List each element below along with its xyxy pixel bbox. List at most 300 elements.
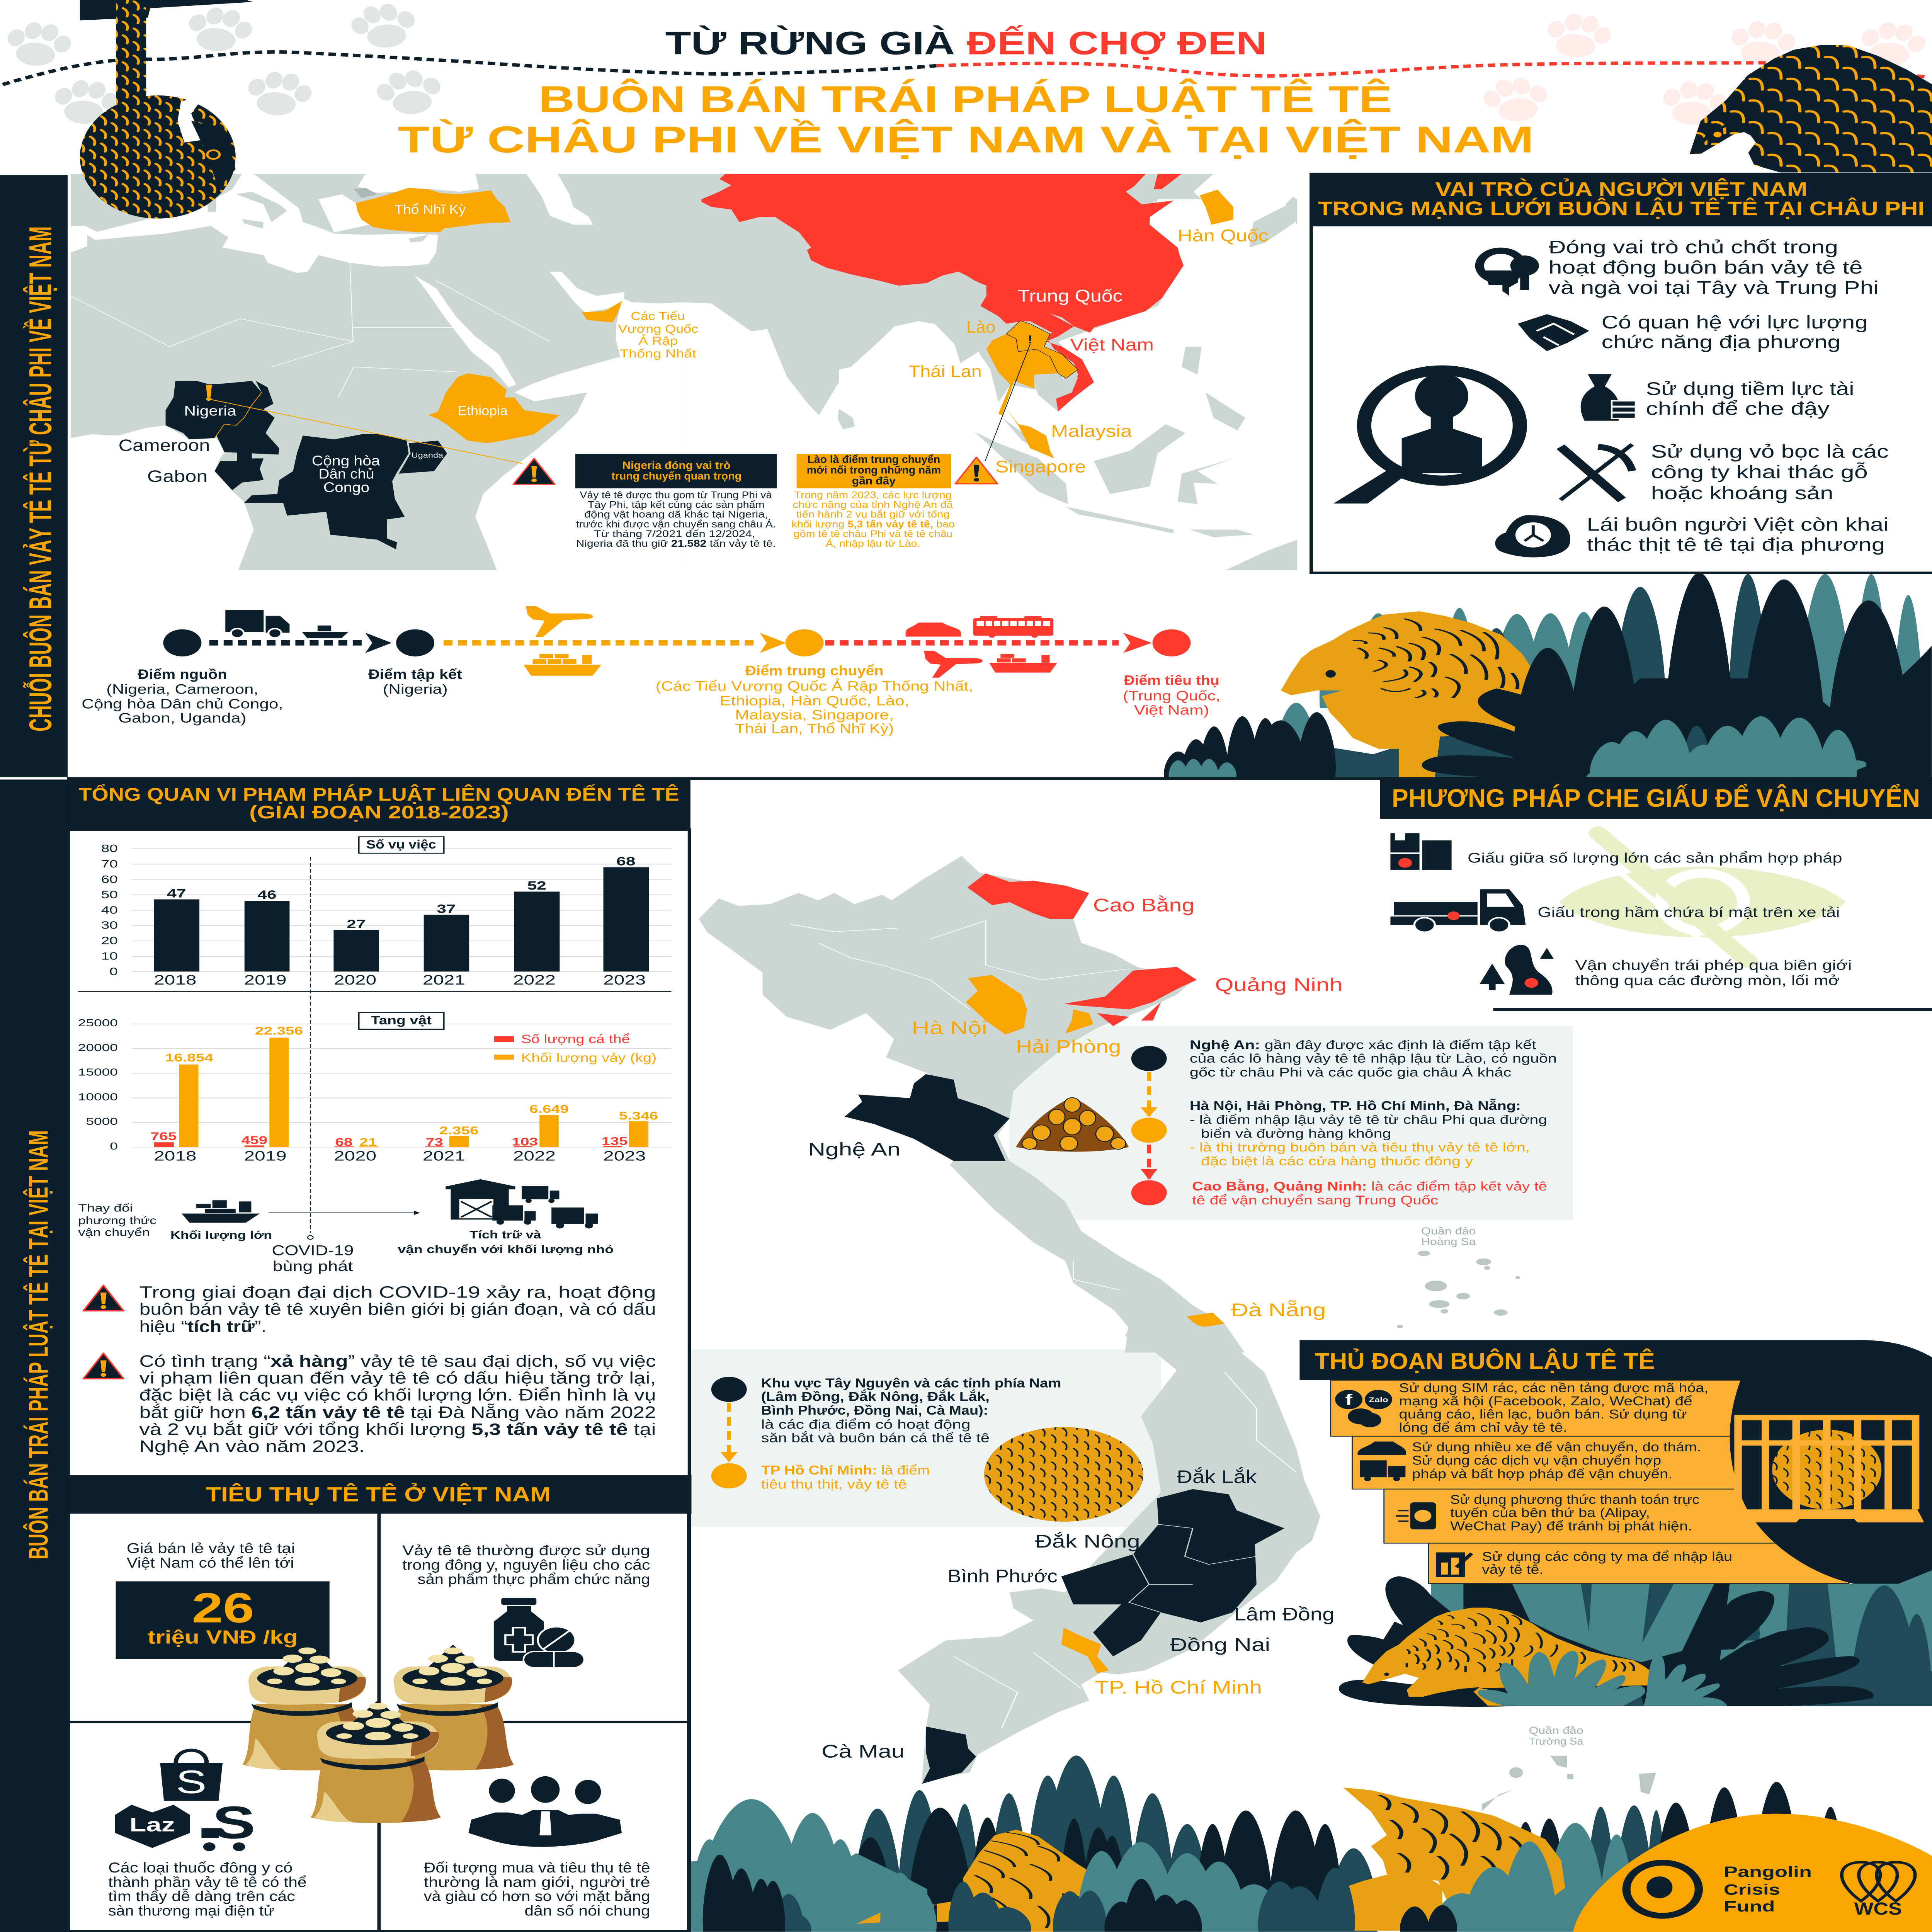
bar chart: seizures: 765 [150, 1130, 177, 1143]
bar chart: cases: 46 [257, 888, 277, 902]
vietnam labels: Đà Nẵng [1231, 1300, 1326, 1320]
map labels: Thống Nhất [620, 347, 696, 360]
label: Truong Sa: Quần đảo [1529, 1725, 1583, 1736]
bar chart: cases: 68 [616, 855, 635, 868]
bar chart: cases: 2022 [513, 973, 556, 988]
callout: Nigeria: trước khi được vận chuyển sang châu Á. [576, 519, 776, 530]
callout: Laos: tiến hành 2 vụ bắt giữ với tổng [796, 509, 950, 520]
callout: Laos: khối lượng 5,3 tấn vảy tê tê, bao [791, 519, 955, 530]
text: online sales [108, 1859, 307, 1919]
pangolin body [1281, 611, 1553, 777]
transport change diagram: phương thức [78, 1215, 156, 1227]
panel: smuggling tactics: Sử dụng SIM rác, các nền tảng được mã hóa, [1399, 1381, 1708, 1395]
icon: shopee [160, 1750, 223, 1801]
icon: boxes [1390, 831, 1452, 870]
map labels: Congo [323, 480, 369, 495]
icon: magnifier with person [1333, 371, 1520, 503]
pangolin bottom left [856, 1830, 1124, 1932]
icon: boat [302, 626, 349, 638]
warning note 2: đặc biệt là các vụ việc có khối lượng lớn. Điển hình là vụ [139, 1386, 656, 1404]
map labels: Thổ Nhĩ Kỳ [395, 202, 466, 217]
label: consumption: (Trung Quốc, [1123, 688, 1220, 704]
map labels [119, 202, 1269, 495]
transport change diagram [78, 1179, 614, 1256]
bar chart: seizures: 2.356 [439, 1124, 479, 1137]
text: buyers: thường là nam giới, người trẻ [424, 1874, 650, 1890]
bar chart: seizures: 5.346 [619, 1110, 658, 1122]
map: Vietnam north [699, 856, 1245, 1352]
label: source: Điểm nguồn [138, 667, 227, 682]
panel: smuggling tactics: tuyến của bên thứ ba (Alipay, [1450, 1505, 1650, 1520]
icon: red car [906, 622, 961, 637]
text: buyers: dân số nói chung [524, 1902, 650, 1919]
title: TỪ CHÂU PHI VỀ VIỆT NAM VÀ TẠI VIỆT NAM [398, 119, 1534, 161]
panel: smuggling tactics: lóng để ám chỉ vảy tê tê. [1399, 1420, 1567, 1435]
vietnam map panels [1009, 1026, 1573, 1220]
map labels: Cameroon [119, 436, 210, 455]
text: buyers: Đối tượng mua và tiêu thụ tê tê [424, 1859, 650, 1876]
logo: WCS [1842, 1862, 1915, 1918]
bar chart: cases: 40 [101, 905, 118, 916]
north route legend: đặc biệt là các cửa hàng thuốc đông y [1201, 1155, 1473, 1168]
panel: smuggling tactics: Sử dụng các công ty ma để nhập lậu [1482, 1549, 1732, 1564]
panel: overview header: (GIAI ĐOẠN 2018-2023) [249, 802, 509, 823]
label: source [82, 667, 283, 726]
bar chart: seizures: 459 [241, 1134, 267, 1146]
map labels: Vương Quốc [618, 322, 698, 335]
south route legend: Bình Phước, Đồng Nai, Cà Mau): [761, 1403, 988, 1418]
logo: Pangolin Crisis Fund: Crisis [1724, 1881, 1780, 1898]
text: online sales: thành phần vảy tê tê có thể [108, 1874, 307, 1890]
bar chart: seizures: 15000 [78, 1066, 118, 1078]
label: gathering: (Nigeria) [383, 682, 448, 697]
vietnam labels: Bình Phước [947, 1566, 1058, 1587]
panel: smuggling tactics: Sử dụng nhiều xe để vận chuyển, do thám. [1412, 1440, 1701, 1454]
label: Hoang Sa [1421, 1225, 1476, 1247]
icon: sendo cart: S [212, 1797, 255, 1848]
panel: role of Vietnamese [1310, 173, 1932, 574]
panel: role of Vietnamese: Có quan hệ với lực lượng [1602, 312, 1868, 333]
panel: smuggling tactics: Sử dụng các dịch vụ vận chuyển hợp [1412, 1453, 1661, 1468]
UAE [582, 301, 622, 323]
bar chart: seizures: 2018 [154, 1149, 196, 1164]
south route legend: Khu vực Tây Nguyên và các tỉnh phía Nam [761, 1376, 1061, 1390]
text: medicine use: trong đông y, nguyên liệu cho các [402, 1556, 650, 1573]
icon: medicine [494, 1598, 584, 1668]
label: Hoang Sa: Hoàng Sa [1421, 1236, 1476, 1247]
icon: mobile payment [1396, 1502, 1436, 1529]
south route legend: TP Hồ Chí Minh: là điểm [761, 1463, 930, 1478]
icon: lazada [115, 1805, 190, 1848]
transport change diagram: vận chuyển [78, 1227, 150, 1238]
bar chart: cases: 50 [101, 889, 118, 901]
bar chart: cases: 27 [347, 917, 366, 931]
bar chart: cases: 2019 [244, 973, 287, 988]
label: source: Gabon, Uganda) [118, 711, 247, 726]
label: consumption: Việt Nam) [1134, 702, 1209, 718]
icon: caged pangolin [1731, 1415, 1924, 1522]
bar chart: cases: Số vụ việc [366, 838, 436, 852]
callout: Nigeria: trung chuyển quan trọng [611, 471, 742, 482]
north route legend: Nghệ An: gần đây được xác định là điểm tập kết [1190, 1038, 1536, 1052]
logo: Pangolin Crisis Fund: Fund [1724, 1898, 1775, 1915]
callout: Laos: Trong năm 2023, các lực lượng [794, 490, 952, 500]
bar chart: cases: 60 [101, 874, 118, 886]
panel: role of Vietnamese: chức năng địa phương [1602, 332, 1840, 352]
label: Truong Sa [1529, 1725, 1583, 1747]
callout: Laos: mới nổi trong những năm [807, 464, 941, 476]
bar chart: seizures: 21 [359, 1136, 377, 1148]
panel: smuggling tactics: pháp và bất hợp pháp để vận chuyển. [1412, 1466, 1672, 1481]
south route legend: (Lâm Đồng, Đắk Nông, Đắk Lắk, [761, 1389, 990, 1404]
title: TỪ RỪNG GIÀ ĐẾN CHỢ ĐEN [665, 25, 1267, 61]
warning note 2: và 2 vụ bắt giữ với tổng khối lượng 5,3 tấn vảy tê tê tại [139, 1420, 656, 1439]
warning note 2 [83, 1352, 656, 1456]
icon: money bag [1581, 374, 1636, 421]
label: consumption [1123, 673, 1220, 718]
bar chart: seizures: 16.854 [165, 1052, 213, 1064]
legend: Khối lượng vảy (kg) [521, 1051, 656, 1065]
icon: truck with hidden compartment [1390, 889, 1526, 932]
map labels: Việt Nam [1070, 335, 1154, 354]
bar chart: cases: 37 [437, 902, 456, 916]
warning note 2: Có tình trạng “xả hàng” vảy tê tê sau đại dịch, số vụ việc [139, 1352, 656, 1371]
icon: truck [225, 610, 289, 638]
panel: consumption in Vietnam [70, 1475, 692, 1932]
icon: red ship [989, 654, 1057, 673]
icons: car and truck [1358, 1442, 1406, 1481]
panel: role of Vietnamese: hoặc khoáng sản [1651, 483, 1833, 503]
province: Ha Noi [966, 975, 1027, 1034]
province: Hai Phong [1065, 1009, 1093, 1034]
bar chart: seizures: 0 [110, 1140, 118, 1152]
COVID-19 marker: bùng phát [273, 1258, 353, 1274]
panel: concealment methods: Giấu trong hầm chứa bí mật trên xe tải [1537, 905, 1840, 920]
transport change diagram: Tích trữ và [469, 1229, 541, 1241]
icon: key and head [1480, 251, 1539, 296]
left band: section 1 title: CHUỖI BUÔN BÁN VẢY TÊ TÊ TỪ CHÂU PHI VỀ VIỆT NAM [23, 226, 58, 731]
vietnam labels: Cao Bằng [1093, 895, 1194, 915]
text: medicine use: Vảy tê tê thường được sử dụng [402, 1542, 650, 1558]
icon: warehouse and trucks [446, 1179, 598, 1228]
callout: Nigeria: Vảy tê tê được thu gom từ Trung Phi và [580, 490, 772, 500]
text: online sales: Các loại thuốc đông y có [108, 1859, 293, 1876]
map labels: Dân chủ [318, 466, 374, 482]
bar chart: seizures: 2020 [334, 1149, 376, 1164]
map: Africa and Middle East to Asia [71, 174, 1297, 570]
map labels: Nigeria [184, 403, 236, 419]
province: Cao Bang [967, 873, 1089, 919]
bar chart: seizures: 10000 [78, 1091, 118, 1102]
province: Ho Chi Minh City [1061, 1628, 1109, 1673]
vietnam labels: Đắk Nông [1035, 1531, 1140, 1552]
point: transit [786, 629, 823, 656]
source countries [166, 381, 447, 549]
province: Ca Mau [922, 1726, 976, 1784]
north route legend: Hà Nội, Hải Phòng, TP. Hồ Chí Minh, Đà Nẵng: [1190, 1098, 1521, 1113]
map labels: Hàn Quốc [1178, 226, 1269, 245]
label: transit: Malaysia, Singapore, [735, 707, 894, 723]
bar chart: seizures: Tang vật [371, 1014, 432, 1027]
callout: Nigeria: Nigeria đóng vai trò [622, 460, 731, 471]
map labels: Singapore [995, 457, 1086, 476]
panel: concealment methods: thông qua các đường mòn, lối mở [1575, 973, 1840, 988]
warning note 1: hiệu “tích trữ”. [139, 1318, 266, 1336]
logo: Pangolin Crisis Fund [1626, 1863, 1812, 1916]
icon: pile of scales [1016, 1097, 1129, 1152]
map labels: Lào [966, 318, 995, 337]
bar chart: cases: 70 [101, 858, 118, 870]
transport change diagram: vận chuyển với khối lượng nhỏ [398, 1243, 614, 1256]
warning note 1 [83, 1283, 656, 1336]
COVID-19 marker [272, 857, 354, 1274]
bar chart: seizures: 103 [512, 1136, 538, 1148]
panel: concealment methods [1380, 777, 1932, 1011]
panel: role of Vietnamese: và ngà voi tại Tây và Trung Phi [1549, 277, 1879, 298]
icon: curled pangolin [984, 1427, 1143, 1522]
province: Da Nang [1186, 1313, 1225, 1327]
islands [1397, 1251, 1656, 1811]
icon: orange ship [524, 654, 601, 676]
foliage and pangolin top section [1164, 573, 1932, 777]
north route legend: gốc từ châu Phi và các quốc gia châu Á khác [1190, 1065, 1511, 1080]
panel: overview header: TỔNG QUAN VI PHẠM PHÁP LUẬT LIÊN QUAN ĐẾN TÊ TÊ [78, 784, 679, 804]
bar chart: cases: 2023 [603, 973, 646, 988]
label: transit: (Các Tiểu Vương Quốc Ả Rập Thống Nhất, [656, 679, 973, 694]
icon: meat [1495, 515, 1570, 557]
warning note 2: vi phạm liên quan đến vảy tê tê có dấu hiệu tăng trở lại, [139, 1369, 656, 1387]
bar chart: seizures: 6.649 [529, 1103, 569, 1116]
panel: role of Vietnamese: Sử dụng tiềm lực tài [1646, 378, 1854, 399]
map labels: Cộng hòa [312, 453, 380, 469]
panel: role of Vietnamese: thác thịt tê tê tại địa phương [1587, 534, 1885, 555]
text: buyers [424, 1859, 650, 1919]
price block [116, 1540, 330, 1659]
province: Nghe An [845, 1074, 1010, 1161]
callout: Nigeria: Nigeria đã thu giữ 21.582 tấn vảy tê tê. [576, 538, 776, 549]
icon: saw and pickaxe [1561, 444, 1632, 500]
label: gathering [368, 667, 462, 697]
label: source: Cộng hòa Dân chủ Congo, [82, 697, 283, 712]
icon: cargo ship [182, 1200, 260, 1223]
panel: smuggling tactics: WeChat Pay) để tránh bị phát hiện. [1450, 1519, 1692, 1533]
map labels: Thái Lan [909, 362, 982, 381]
north route legend: biển và đường hàng không [1201, 1127, 1391, 1141]
bar chart: cases: 47 [167, 887, 186, 900]
panel: role of Vietnamese: Lái buôn người Việt còn khai [1587, 514, 1889, 535]
bar chart: cases [101, 837, 671, 988]
panel: overview header [70, 780, 690, 831]
title: BUÔN BÁN TRÁI PHÁP LUẬT TÊ TÊ [539, 78, 1392, 120]
icon: red bus [973, 616, 1053, 638]
left band: section 1 title [0, 175, 68, 777]
price block: Việt Nam có thể lên tới [127, 1554, 294, 1571]
text: medicine use [402, 1542, 650, 1587]
bar chart: cases: 2021 [423, 973, 465, 988]
point: gathering [396, 629, 434, 656]
vietnam labels: Cà Mau [821, 1741, 905, 1762]
label: consumption: Điểm tiêu thụ [1124, 673, 1219, 688]
vietnam labels [808, 895, 1343, 1762]
legend: Số lượng cá thể [521, 1032, 630, 1046]
label: transit: Điểm trung chuyển [745, 663, 884, 679]
bar chart: seizures: 2022 [513, 1149, 556, 1164]
icon: ghost company [1436, 1553, 1472, 1577]
vietnam labels: TP. Hồ Chí Minh [1095, 1677, 1262, 1698]
bar chart: cases: 52 [527, 879, 546, 893]
callout: Laos: gần đây [852, 475, 896, 487]
panel: smuggling tactics: quảng cáo, liên lạc, buôn bán. Sử dụng từ [1399, 1407, 1687, 1422]
text: online sales: sàn thương mại điện tử [108, 1902, 274, 1919]
label: Hoang Sa: Quần đảo [1421, 1225, 1476, 1236]
south route legend: là các địa điểm có hoạt động [761, 1417, 970, 1432]
left band: section 2 title: BUÔN BÁN TRÁI PHÁP LUẬT TÊ TÊ TẠI VIỆT NAM [23, 1130, 54, 1560]
Ethiopia [428, 373, 560, 443]
foliage bottom with pangolins [690, 1755, 1845, 1932]
price block: Giá bán lẻ vảy tê tê tại [127, 1540, 295, 1556]
panel: role of Vietnamese: Đóng vai trò chủ chốt trong [1549, 237, 1838, 257]
point: source [163, 629, 201, 656]
map labels: Gabon [147, 467, 207, 486]
foliage and pangolin right middle [1339, 1570, 1932, 1707]
bar chart: seizures: 2023 [603, 1149, 646, 1164]
bar chart: seizures: 68 [335, 1136, 352, 1148]
south route legend [711, 1376, 1143, 1522]
illustration: scale sacks [242, 1645, 514, 1823]
icons: social apps: f [1345, 1391, 1353, 1408]
panel: role of Vietnamese: chính để che đậy [1646, 398, 1830, 419]
label: Truong Sa: Trường Sa [1529, 1735, 1583, 1747]
text: medicine use: sản phẩm thực phẩm chức năng [418, 1571, 650, 1587]
warning note 2: bắt giữ hơn 6,2 tấn vảy tê tê tại Đà Nẵng vào năm 2022 [139, 1403, 656, 1422]
price block: triệu VNĐ /kg [148, 1627, 298, 1648]
price block: 26 [192, 1585, 254, 1631]
icon: crossed eye [1559, 833, 1846, 968]
callout: Nigeria: động vật hoang dã khác tại Nigeria, [584, 509, 768, 520]
icon: orange plane [526, 606, 593, 637]
callout: Nigeria [575, 454, 777, 549]
label: gathering: Điểm tập kết [368, 667, 462, 682]
map labels: Ả Rập [639, 334, 678, 347]
vietnam labels: Nghệ An [808, 1139, 900, 1160]
warning note 2: Nghệ An vào năm 2023. [139, 1437, 365, 1456]
pangolin body [1362, 1608, 1658, 1706]
bar chart: seizures: 22.356 [255, 1025, 303, 1037]
icon: shopee: S [176, 1764, 207, 1800]
icon: red plane [924, 651, 983, 678]
panel: consumption in Vietnam: TIÊU THỤ TÊ TÊ Ở VIỆT NAM [206, 1483, 551, 1506]
trade chain flow [82, 606, 1220, 736]
transport change diagram: Thay đổi [78, 1202, 133, 1214]
vietnam labels: Đắk Lắk [1177, 1467, 1257, 1487]
north route legend: Cao Bằng, Quảng Ninh: là các điểm tập kết vảy tê [1192, 1179, 1547, 1194]
bar chart: cases: 2018 [154, 973, 196, 988]
warning note 1: buôn bán vảy tê tê xuyên biên giới bị gián đoạn, và có dấu [139, 1300, 656, 1318]
panel: role of Vietnamese: hoạt động buôn bán vảy tê tê [1549, 257, 1863, 278]
map labels: Trung Quốc [1017, 287, 1123, 305]
callout: Laos [791, 454, 955, 549]
north route legend [1131, 1038, 1557, 1207]
panel: concealment methods: Vận chuyển trái phép qua biên giới [1575, 957, 1852, 973]
panel: role of Vietnamese: Sử dụng vỏ bọc là các [1651, 441, 1889, 462]
pangolin top right [1690, 45, 1932, 172]
bar chart: cases: 2020 [334, 973, 376, 988]
transport change diagram: Khối lượng lớn [170, 1229, 272, 1242]
bar chart: seizures [78, 1013, 671, 1164]
bar chart: seizures: 2021 [423, 1149, 465, 1164]
callout: Laos: chức năng của tỉnh Nghệ An đã [793, 499, 953, 510]
map labels: Malaysia [1051, 422, 1132, 440]
icons: social apps [1335, 1390, 1392, 1427]
icon: businessmen [468, 1776, 622, 1847]
province: Quang Ninh [1064, 967, 1197, 1026]
map labels: Uganda [412, 451, 443, 459]
icon: forest road [1480, 945, 1554, 995]
north route legend: - là thị trường buôn bán và tiêu thụ vảy tê tê lớn, [1190, 1140, 1530, 1154]
panel: role of Vietnamese: công ty khai thác gỗ [1651, 462, 1868, 482]
label: transit: Thái Lan, Thổ Nhĩ Kỳ) [735, 721, 894, 736]
COVID-19 marker: COVID-19 [272, 1242, 354, 1259]
logos block [1573, 1814, 1932, 1932]
pangolin bottom right [1323, 1787, 1565, 1931]
bar chart: cases: 20 [101, 935, 118, 947]
warning note 1: Trong giai đoạn đại dịch COVID-19 xảy ra, hoạt động [139, 1283, 656, 1302]
background paw prints [2, 0, 1929, 128]
icon: handshake [1518, 314, 1589, 351]
vietnam labels: Quảng Ninh [1215, 975, 1343, 995]
bar chart: cases: 30 [101, 920, 118, 931]
vietnam labels: Hải Phòng [1016, 1036, 1121, 1057]
icon: lazada: Laz [129, 1814, 175, 1835]
panel: smuggling tactics: mạng xã hội (Facebook, Zalo, WeChat) để [1399, 1394, 1692, 1408]
point: consumption [1153, 629, 1190, 656]
vietnam labels: Hà Nội [912, 1018, 987, 1038]
title [398, 25, 1534, 161]
panel: smuggling tactics: Sử dụng phương thức thanh toán trực [1450, 1492, 1699, 1507]
vietnam labels: Đồng Nai [1170, 1634, 1270, 1655]
bar chart: cases: 0 [109, 966, 118, 978]
text: online sales: tìm thấy dễ dàng trên các [108, 1888, 295, 1904]
bar chart: cases: 10 [101, 951, 118, 962]
bar chart: cases: 80 [101, 843, 118, 855]
map labels: Ethiopia [457, 403, 508, 418]
panel: smuggling tactics: THỦ ĐOẠN BUÔN LẬU TÊ TÊ [1315, 1349, 1655, 1374]
dotted trail [3, 52, 1926, 85]
callout: Nigeria: Tây Phi, tập kết cùng các sản phẩm [588, 499, 765, 510]
text: buyers: và giàu có hơn so với mặt bằng [424, 1888, 650, 1904]
bar chart: seizures: 25000 [78, 1017, 118, 1029]
bar chart: seizures: 20000 [78, 1042, 118, 1053]
bar chart: seizures: 73 [425, 1136, 443, 1148]
pangolin hanging from branch [80, 0, 253, 219]
logo: WCS: WCS [1854, 1899, 1902, 1918]
callout: Laos: Lào là điểm trung chuyển [808, 454, 940, 466]
panel: concealment methods: Giấu giữa số lượng lớn các sản phẩm hợp pháp [1468, 850, 1842, 866]
bar chart: seizures: 5000 [86, 1116, 118, 1127]
left band: section 2 title [0, 780, 70, 1932]
bar chart: seizures: 2019 [244, 1149, 287, 1164]
Turkey [356, 188, 510, 232]
map labels: Các Tiểu [631, 310, 685, 323]
provinces: highlands and southeast [1061, 1489, 1284, 1656]
label: source: (Nigeria, Cameroon, [106, 682, 259, 697]
map: Vietnam south [898, 1304, 1320, 1784]
north route legend: - là điểm nhập lậu vảy tê tê từ châu Phi qua đường [1190, 1113, 1547, 1127]
north route legend: tê để vận chuyển sang Trung Quốc [1192, 1193, 1438, 1207]
vietnam labels: Lâm Đồng [1234, 1604, 1335, 1624]
panel: smuggling tactics [1299, 1340, 1932, 1584]
panel: smuggling tactics: vảy tê tê. [1482, 1562, 1543, 1577]
